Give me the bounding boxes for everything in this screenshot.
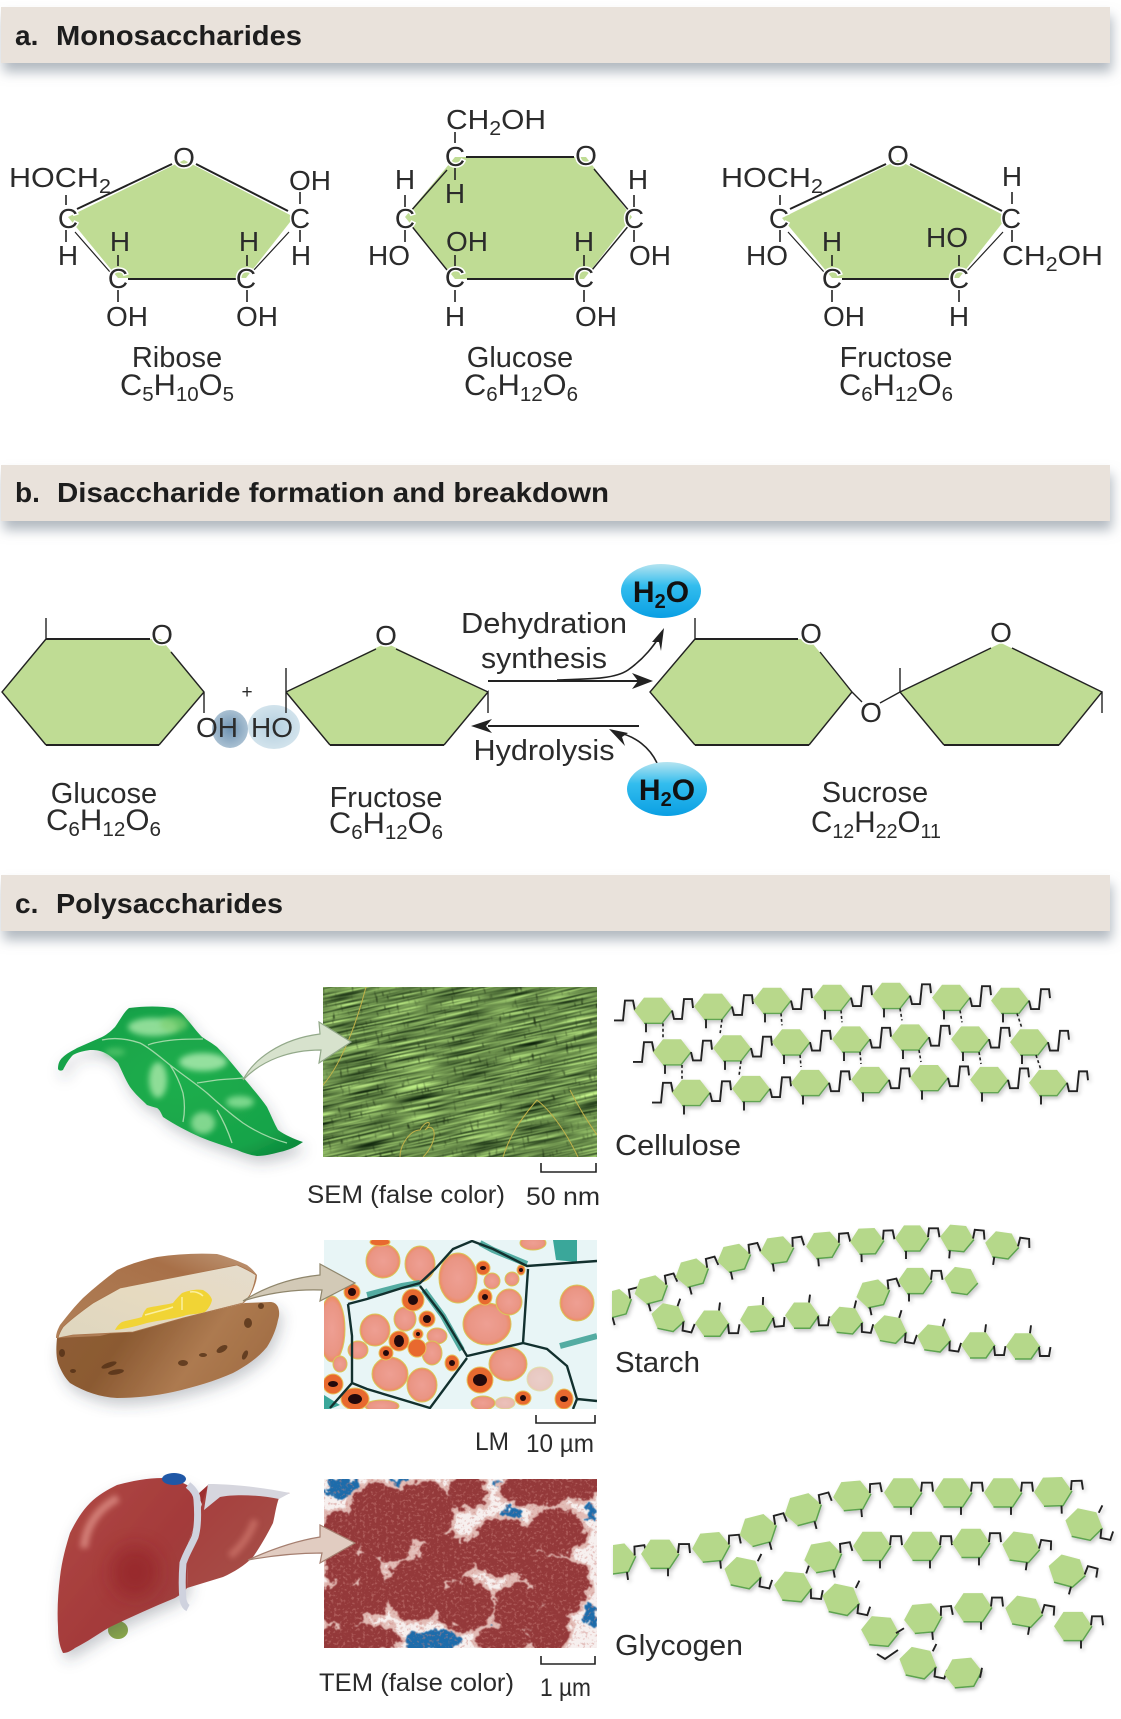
ribose structure: H — [239, 226, 259, 257]
arrow: dehydration synthesis — [461, 608, 664, 689]
left labels: 6 — [68, 819, 80, 841]
glucose structure: H — [445, 301, 465, 332]
glucose structure: 2 — [489, 118, 501, 140]
glucose label: H — [498, 369, 520, 402]
left labels: 6 — [351, 822, 363, 844]
water molecule: consumed: H — [639, 774, 661, 807]
ribose structure: C — [108, 263, 128, 294]
left labels: O — [125, 804, 149, 837]
scale bar and caption: LM — [475, 1415, 595, 1458]
glucose structure: OH — [446, 226, 488, 257]
scale bar and caption: SEM: 50 nm — [526, 1183, 600, 1211]
glucose structure: C — [574, 262, 594, 293]
header: c. Polysaccharides: Polysaccharides — [56, 888, 283, 919]
starch chains — [595, 1224, 1050, 1359]
glycogen chains — [596, 1476, 1118, 1689]
fructose label: 12 — [895, 384, 918, 406]
fructose label — [839, 342, 953, 406]
left labels: H — [80, 804, 102, 837]
header: b. Disaccharide formation and breakdown: Disaccharide formation and breakdown — [57, 477, 609, 508]
fructose structure: H — [949, 301, 969, 332]
arrow: hydrolysis — [471, 719, 657, 767]
left labels: C — [46, 804, 68, 837]
micrograph: starch LM — [319, 1236, 597, 1412]
fructose structure: C — [1001, 203, 1021, 234]
scale bar and caption: TEM — [319, 1656, 595, 1702]
icon: baked potato — [56, 1254, 279, 1398]
sucrose molecule — [650, 617, 1102, 745]
fructose structure: C — [769, 203, 789, 234]
fructose structure: HO — [746, 240, 788, 271]
hydroxyl groups: OH — [196, 712, 238, 743]
ribose structure: C — [290, 203, 310, 234]
fructose structure: C — [949, 263, 969, 294]
glucose structure: C — [395, 203, 415, 234]
fructose structure: O — [887, 140, 909, 171]
fructose label: 6 — [942, 384, 953, 406]
cellulose chains — [614, 983, 1088, 1114]
sucrose molecule: O — [800, 618, 822, 649]
fructose structure: OH — [1058, 240, 1103, 271]
ribose structure: O — [173, 142, 195, 173]
hydroxyl groups — [196, 682, 300, 749]
ribose structure: C — [58, 203, 78, 234]
water molecule: released: 2 — [655, 591, 666, 613]
header: c. Polysaccharides — [1, 875, 1110, 931]
ribose label: O — [199, 369, 223, 402]
header: a. Monosaccharides: a. — [15, 20, 38, 51]
ribose label: C — [120, 369, 142, 402]
glucose structure: O — [575, 140, 597, 171]
glucose structure: HO — [368, 240, 410, 271]
glucose label: 6 — [567, 384, 578, 406]
glucose label — [464, 342, 578, 406]
water molecule: consumed: 2 — [661, 789, 672, 811]
ribose label: Ribose — [132, 342, 222, 374]
arrow: dehydration synthesis: synthesis — [481, 643, 607, 675]
header: b. Disaccharide formation and breakdown — [1, 465, 1110, 521]
water molecule: released: O — [666, 576, 689, 609]
sucrose label — [811, 777, 941, 843]
water molecule: consumed: O — [672, 774, 695, 807]
glucose structure: OH — [501, 104, 546, 135]
fructose label: 6 — [861, 384, 873, 406]
glucose structure: OH — [575, 301, 617, 332]
icon: liver — [58, 1473, 290, 1653]
sucrose molecule: O — [990, 617, 1012, 648]
scale bar and caption: SEM: SEM (false color) — [307, 1181, 505, 1209]
glucose structure: H — [628, 164, 648, 195]
sucrose label: O — [898, 806, 921, 839]
icon: leaf — [58, 1006, 303, 1156]
ribose structure: H — [110, 226, 130, 257]
glucose molecule — [2, 618, 204, 745]
ribose structure — [9, 142, 331, 332]
ribose structure: HOCH — [9, 162, 91, 193]
left labels — [46, 778, 443, 844]
ribose structure: OH — [289, 165, 331, 196]
fructose structure: CH — [1002, 240, 1042, 271]
scale bar and caption: LM: 10 µm — [526, 1430, 594, 1458]
ribose structure: H — [58, 240, 78, 271]
glucose structure: OH — [629, 240, 671, 271]
left labels: 12 — [102, 819, 125, 841]
glucose structure — [368, 104, 671, 332]
scale bar and caption: SEM — [307, 1163, 600, 1211]
left labels: C — [329, 807, 351, 840]
micrograph: cellulose SEM — [323, 987, 597, 1157]
scale bar and caption: LM: LM — [475, 1428, 509, 1456]
fructose molecule: O — [375, 620, 397, 651]
header: a. Monosaccharides: Monosaccharides — [56, 20, 302, 51]
glucose structure: H — [395, 164, 415, 195]
fructose structure: H — [1002, 161, 1022, 192]
fructose structure: OH — [823, 301, 865, 332]
fructose label: Fructose — [840, 342, 952, 374]
fructose label: H — [873, 369, 895, 402]
glucose label: 6 — [486, 384, 498, 406]
ribose structure: OH — [236, 301, 278, 332]
fructose structure: H — [822, 226, 842, 257]
left labels: O — [408, 807, 432, 840]
sucrose label: 22 — [876, 821, 898, 843]
glucose structure: H — [445, 178, 465, 209]
label: glycogen: Glycogen — [615, 1630, 743, 1662]
glucose label: Glucose — [467, 342, 573, 374]
left labels: Glucose — [51, 778, 157, 810]
ribose structure: OH — [106, 301, 148, 332]
scale bar and caption: TEM: 1 µm — [540, 1674, 591, 1702]
glucose structure: C — [445, 141, 465, 172]
fructose structure: C — [822, 263, 842, 294]
scale bar and caption: TEM: TEM (false color) — [319, 1669, 514, 1697]
left labels: 12 — [385, 822, 408, 844]
glucose structure: C — [445, 262, 465, 293]
fructose molecule — [286, 620, 488, 745]
water molecule: released: H — [633, 576, 655, 609]
fructose structure: 2 — [811, 176, 823, 198]
left labels: 6 — [432, 822, 443, 844]
fructose structure — [721, 140, 1103, 332]
arrow: leaf to SEM — [243, 1022, 351, 1080]
sucrose molecule: O — [860, 697, 882, 728]
water molecule: released — [621, 564, 701, 618]
arrow: hydrolysis: Hydrolysis — [474, 735, 614, 767]
glucose molecule: O — [151, 619, 173, 650]
ribose label: 10 — [176, 384, 199, 406]
sucrose label: C — [811, 806, 833, 839]
header: b. Disaccharide formation and breakdown: b. — [15, 477, 40, 508]
fructose label: C — [839, 369, 861, 402]
left labels: H — [363, 807, 385, 840]
glucose label: C — [464, 369, 486, 402]
arrow: potato to LM — [243, 1264, 355, 1301]
fructose structure: 2 — [1046, 254, 1058, 276]
fructose structure: HOCH — [721, 162, 803, 193]
left labels: 6 — [149, 819, 161, 841]
fructose label: O — [918, 369, 942, 402]
sucrose label: H — [854, 806, 876, 839]
glucose structure: C — [624, 203, 644, 234]
arrow: dehydration synthesis: Dehydration — [461, 608, 627, 640]
header: a. Monosaccharides — [1, 7, 1110, 63]
hydroxyl groups: + — [241, 682, 253, 703]
ribose label: 5 — [142, 384, 154, 406]
ribose label — [120, 342, 234, 406]
glucose structure: CH — [446, 104, 486, 135]
glucose label: 12 — [520, 384, 543, 406]
header: c. Polysaccharides: c. — [15, 888, 38, 919]
glucose label: O — [543, 369, 567, 402]
ribose label: H — [154, 369, 176, 402]
ribose label: 5 — [223, 384, 234, 406]
sucrose label: 12 — [832, 821, 854, 843]
glucose structure: H — [574, 226, 594, 257]
ribose structure: H — [291, 240, 311, 271]
arrow: liver to TEM — [248, 1525, 355, 1563]
hydroxyl groups: HO — [251, 712, 293, 743]
sucrose label: Sucrose — [822, 777, 928, 809]
label: starch: Starch — [615, 1347, 700, 1379]
sucrose label: 11 — [921, 821, 941, 843]
label: cellulose: Cellulose — [615, 1130, 741, 1162]
micrograph: glycogen TEM — [322, 1478, 597, 1650]
ribose structure: C — [236, 263, 256, 294]
left labels: Fructose — [330, 782, 442, 814]
ribose structure: 2 — [99, 176, 111, 198]
fructose structure: HO — [926, 222, 968, 253]
water molecule: consumed — [627, 762, 707, 816]
